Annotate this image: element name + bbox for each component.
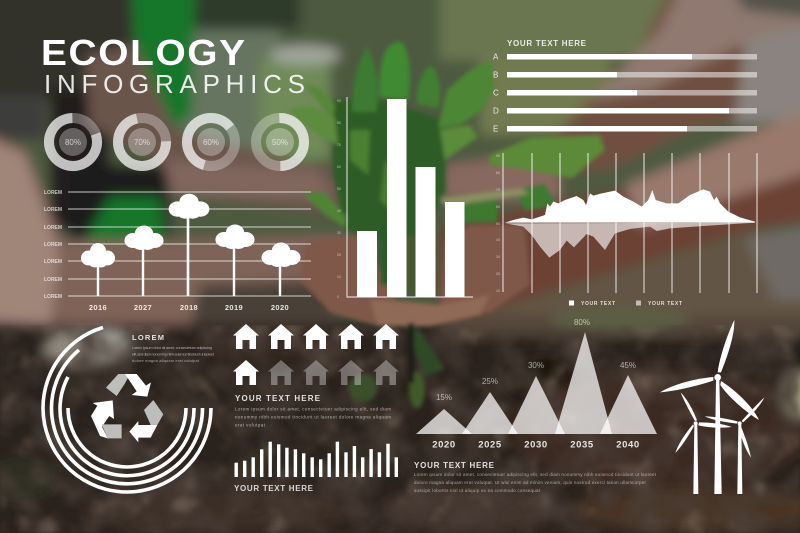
year labels — [89, 303, 289, 312]
progress bars: B — [493, 70, 498, 80]
percent labels: 45% — [620, 361, 636, 370]
mini bar chart — [234, 442, 398, 493]
donut charts — [43, 112, 304, 172]
text block: houses: erat volutpat — [235, 422, 266, 428]
percent labels — [436, 318, 636, 402]
bar chart: 70 — [337, 143, 341, 147]
hands — [300, 225, 530, 325]
area chart: 50 — [496, 222, 500, 226]
year labels — [432, 440, 640, 450]
bar chart: 40 — [337, 209, 341, 213]
progress bars: C — [493, 88, 499, 98]
bar chart: 90 — [337, 99, 341, 103]
progress bars: YOUR TEXT HERE — [507, 39, 587, 48]
donut 70% — [118, 118, 166, 166]
area chart: 40 — [496, 238, 500, 242]
area chart: 90 — [496, 154, 500, 158]
bar chart: 50 — [337, 187, 341, 191]
donut 50%: 50% — [272, 138, 288, 147]
text block: mountains: Lorem ipsum dolor sit amet, consectetuer adipiscing elit, sed diam nonummy nibh euismod tincidunt ut laoreet — [414, 472, 657, 477]
bar chart: 10 — [337, 275, 341, 279]
bar chart: 30 — [337, 231, 341, 235]
turbine large — [660, 320, 759, 494]
bar chart: 80 — [337, 121, 341, 125]
upper scene base — [0, 0, 800, 320]
axis labels: LOREM — [44, 242, 62, 248]
donut 80% — [43, 112, 103, 172]
axis labels: LOREM — [44, 190, 62, 196]
axis labels: LOREM — [44, 259, 62, 265]
area chart: 10 — [496, 289, 500, 293]
plant leaves — [333, 100, 445, 240]
text block: lorem — [132, 333, 215, 363]
axis labels — [44, 190, 62, 300]
area chart: 80 — [496, 171, 500, 175]
year labels: 2019 — [225, 303, 243, 312]
text block: lorem: dolore magna aliquam erat volutpat — [132, 358, 200, 363]
turbine right — [705, 397, 764, 494]
donut 60% — [181, 112, 241, 172]
area chart: 20 — [496, 272, 500, 276]
percent labels: 80% — [574, 318, 590, 327]
percent labels: 15% — [436, 393, 452, 402]
area lower — [505, 223, 755, 258]
text block: lorem: Lorem ipsum dolor sit amet, consectetuer adipiscing — [132, 345, 212, 350]
axis labels: LOREM — [44, 207, 62, 213]
legend: YOUR TEXT — [648, 301, 682, 307]
turbine left — [675, 392, 732, 494]
text block: houses: nonummy nibh euismod tincidunt ut laoreet dolore magna aliquam — [235, 414, 391, 420]
year labels: 2040 — [616, 440, 640, 450]
axis labels: LOREM — [44, 225, 62, 231]
donut 70%: 70% — [134, 138, 150, 147]
year labels: 2030 — [524, 440, 548, 450]
icon: recycle — [91, 374, 163, 442]
text block: lorem: elit, sed diam nonummy nibh euismod tincidunt ut laoreet — [132, 352, 215, 356]
trees — [81, 194, 301, 296]
percent labels: 30% — [528, 361, 544, 370]
percent labels: 25% — [482, 377, 498, 386]
donut 50% — [256, 118, 304, 166]
mountain chart — [416, 318, 657, 450]
text block: mountains: dolore magna aliquam erat volutpat. Ut wisi enim ad minim veniam, quis nostrud exerci tation ullamcorper — [414, 480, 646, 485]
tree chart — [44, 190, 311, 312]
text block: lorem: LOREM — [132, 333, 164, 342]
donut 60%: 60% — [203, 138, 219, 147]
recycling ring — [43, 328, 211, 492]
bar chart: 20 — [337, 253, 341, 257]
text block: mountains — [414, 461, 657, 493]
area chart — [496, 153, 757, 307]
house icons — [233, 324, 399, 385]
area chart: 60 — [496, 205, 500, 209]
title — [41, 32, 305, 99]
mini bar chart: YOUR TEXT HERE — [234, 484, 314, 493]
progress bars: A — [493, 52, 499, 62]
axis labels: LOREM — [44, 277, 62, 283]
year labels: 2027 — [134, 303, 152, 312]
donut 80%: 80% — [65, 138, 81, 147]
wind turbines — [660, 320, 764, 494]
forearm upper — [85, 45, 340, 215]
area chart: 70 — [496, 188, 500, 192]
upper left sleeve and shadow — [0, 0, 135, 100]
text block: houses: YOUR TEXT HERE — [235, 394, 321, 403]
progress bars — [493, 39, 757, 134]
bar chart: 60 — [337, 165, 341, 169]
year labels: 2025 — [478, 440, 502, 450]
year labels: 2016 — [89, 303, 107, 312]
bar chart: 0 — [337, 295, 339, 299]
arcs — [43, 328, 211, 492]
year labels: 2018 — [180, 303, 198, 312]
year labels: 2020 — [432, 440, 456, 450]
text block: mountains: suscipit lobortis nisl ut aliquip ex ea commodo consequat — [414, 488, 541, 493]
text block: houses: Lorem ipsum dolor sit amet, consectetuer adipiscing elit, sed diam — [235, 406, 391, 412]
year labels: 2020 — [271, 303, 289, 312]
bars — [357, 99, 464, 297]
forearm lower — [0, 125, 385, 335]
area chart: 30 — [496, 255, 500, 259]
soil texture — [0, 325, 800, 533]
bar chart — [337, 97, 473, 299]
axis labels: LOREM — [44, 294, 62, 300]
year labels: 2035 — [570, 440, 594, 450]
title: INFOGRAPHICS — [44, 69, 305, 99]
legend — [569, 300, 682, 307]
title: ECOLOGY — [41, 32, 247, 73]
legend: YOUR TEXT — [581, 301, 615, 307]
right arms — [545, 0, 800, 172]
progress bars: D — [493, 106, 499, 116]
triangles — [416, 332, 657, 434]
progress bars: E — [493, 124, 498, 134]
soil — [0, 324, 800, 533]
text block: houses — [235, 394, 391, 428]
area upper — [505, 189, 755, 223]
text block: mountains: YOUR TEXT HERE — [414, 461, 495, 470]
